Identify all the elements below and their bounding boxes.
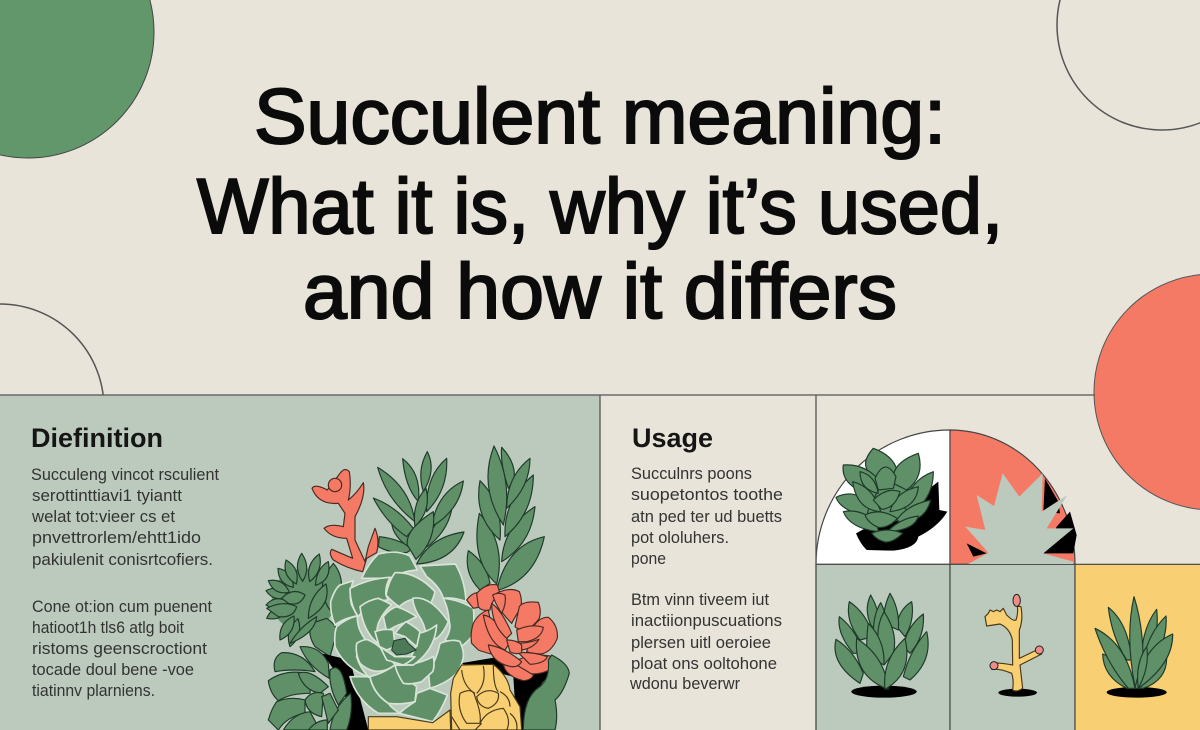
yellow tile right	[1075, 564, 1200, 730]
title: What it is, why it’s used,	[197, 162, 1003, 250]
coral branch	[312, 470, 378, 572]
definition text block: tiatinnv plarniens.	[32, 682, 155, 700]
illustration: succulent bouquet	[266, 446, 569, 730]
icon: spiky aloe	[1095, 597, 1173, 698]
usage text block: pot ololuhers.	[631, 529, 729, 547]
definition text block: serottinttiavi1 tyiantt	[32, 487, 182, 505]
definition text block: pakiulenit conisrtcofiers.	[32, 551, 213, 569]
coral circle right	[1094, 274, 1200, 510]
usage text block: atn ped ter ud buetts	[631, 508, 782, 526]
panel dividers	[0, 395, 1095, 730]
usage text block	[629, 465, 783, 693]
icon: pale spiky plant	[965, 473, 1077, 564]
usage text block: Btm vinn tiveem iut	[631, 591, 769, 609]
title	[197, 72, 1003, 335]
definition text block	[31, 466, 219, 700]
outline circle top right	[1057, 0, 1200, 130]
panel: icon grid	[816, 430, 1200, 730]
usage text block: suopetontos toothe	[631, 486, 783, 504]
usage text block: Succulnrs poons	[631, 465, 752, 483]
definition text block: pnvettrorlem/ehtt1ido	[32, 529, 201, 547]
icon: yellow twig plant	[985, 594, 1043, 697]
coral rose	[467, 585, 557, 681]
panel: usage	[600, 395, 816, 730]
panel: definition	[0, 395, 600, 730]
definition text block: welat tot:vieer cs et	[31, 508, 175, 526]
sage tile left	[816, 564, 950, 730]
usage text block: wdonu beverwr	[629, 675, 740, 693]
usage text block: plersen uitl oeroiee	[631, 634, 771, 652]
bottom-left rosette	[268, 647, 351, 730]
green circle top left	[0, 0, 154, 158]
definition text block: Cone ot:ion cum puenent	[32, 598, 212, 616]
title: and how it differs	[303, 247, 897, 335]
definition text block: hatioot1h tls6 atlg boit	[32, 619, 184, 637]
usage text block: pone	[631, 550, 666, 568]
usage heading: Usage	[632, 423, 713, 453]
icon: rosette with shadow	[836, 448, 947, 551]
yellow pot	[368, 710, 451, 730]
sage tile centre	[950, 564, 1075, 730]
white quarter tile	[816, 430, 950, 564]
yellow succulent	[451, 664, 522, 730]
definition text block: Succuleng vincot rsculient	[31, 466, 219, 484]
icon: agave	[835, 593, 928, 698]
coral quarter tile	[950, 430, 1075, 564]
left dark rosette	[266, 553, 341, 657]
usage text block: inactiionpuscuations	[631, 612, 782, 630]
tall green stem	[467, 446, 544, 591]
definition text block: ristoms geenscroctiont	[32, 640, 207, 658]
usage text block: ploat ons ooltohone	[631, 655, 777, 673]
definition text block: tocade doul bene -voe	[32, 661, 194, 679]
trailing green leaf	[523, 655, 569, 730]
outline circle left	[0, 304, 104, 512]
middle green stem	[373, 452, 464, 564]
black shadow behind plants	[322, 653, 553, 730]
definition heading: Diefinition	[31, 423, 163, 453]
large central rosette	[331, 552, 474, 722]
title: Succulent meaning:	[254, 72, 946, 160]
